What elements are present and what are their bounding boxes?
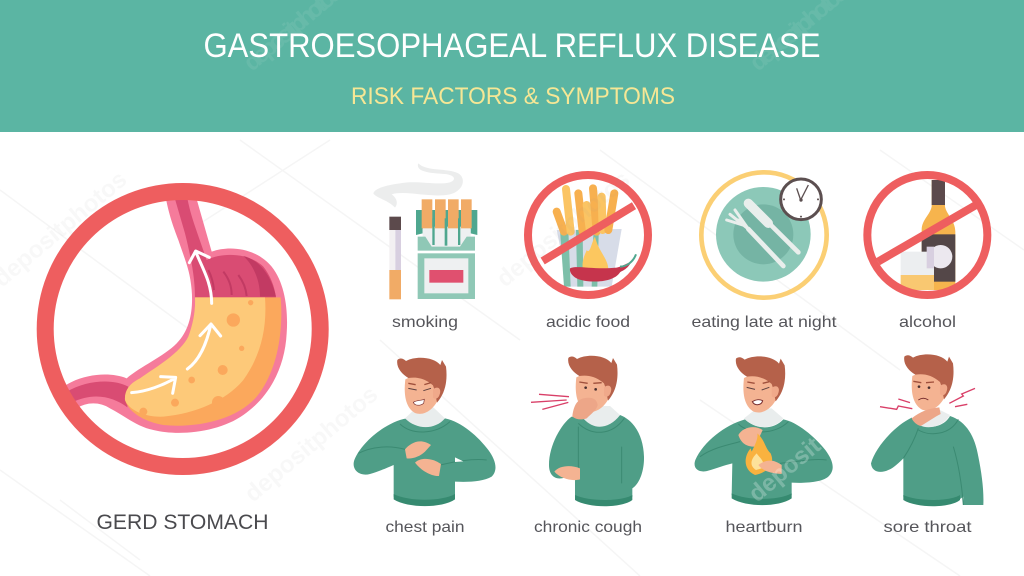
subtitle: RISK FACTORS & SYMPTOMS (351, 83, 675, 110)
label: alcohol: alcohol (899, 314, 956, 331)
label: acidic food: acidic food (546, 314, 630, 331)
figure: chronic cough (531, 356, 644, 506)
watermarks: depositphotos (240, 381, 383, 508)
icon: eating late at night (701, 172, 827, 298)
label: heartburn: heartburn (726, 519, 802, 536)
figure: chest pain (354, 358, 495, 506)
label: smoking: smoking (392, 314, 458, 331)
cough lines (531, 394, 569, 409)
icon: alcohol (867, 175, 987, 295)
title: GASTROESOPHAGEAL REFLUX DISEASE (204, 27, 820, 65)
flame (746, 433, 772, 475)
label: chest pain: chest pain (386, 519, 464, 536)
no-sign ring around stomach (45, 192, 320, 466)
label: eating late at night: eating late at night (692, 314, 837, 331)
watermarks (0, 0, 887, 508)
arrows (132, 251, 221, 393)
label: gerd stomach: GERD STOMACH (96, 511, 268, 534)
watermarks: depositphotos (492, 166, 635, 293)
label: chronic cough: chronic cough (534, 519, 642, 536)
label: sore throat: sore throat (884, 519, 972, 536)
figure: heartburn (695, 356, 833, 505)
header banner (0, 0, 1024, 132)
icon: acidic food (528, 175, 648, 295)
pain marks (880, 388, 975, 409)
watermarks: depositphotos (744, 381, 887, 508)
stomach illustration (63, 193, 287, 433)
icon: smoking (373, 163, 477, 299)
figure: sore throat (871, 354, 983, 506)
